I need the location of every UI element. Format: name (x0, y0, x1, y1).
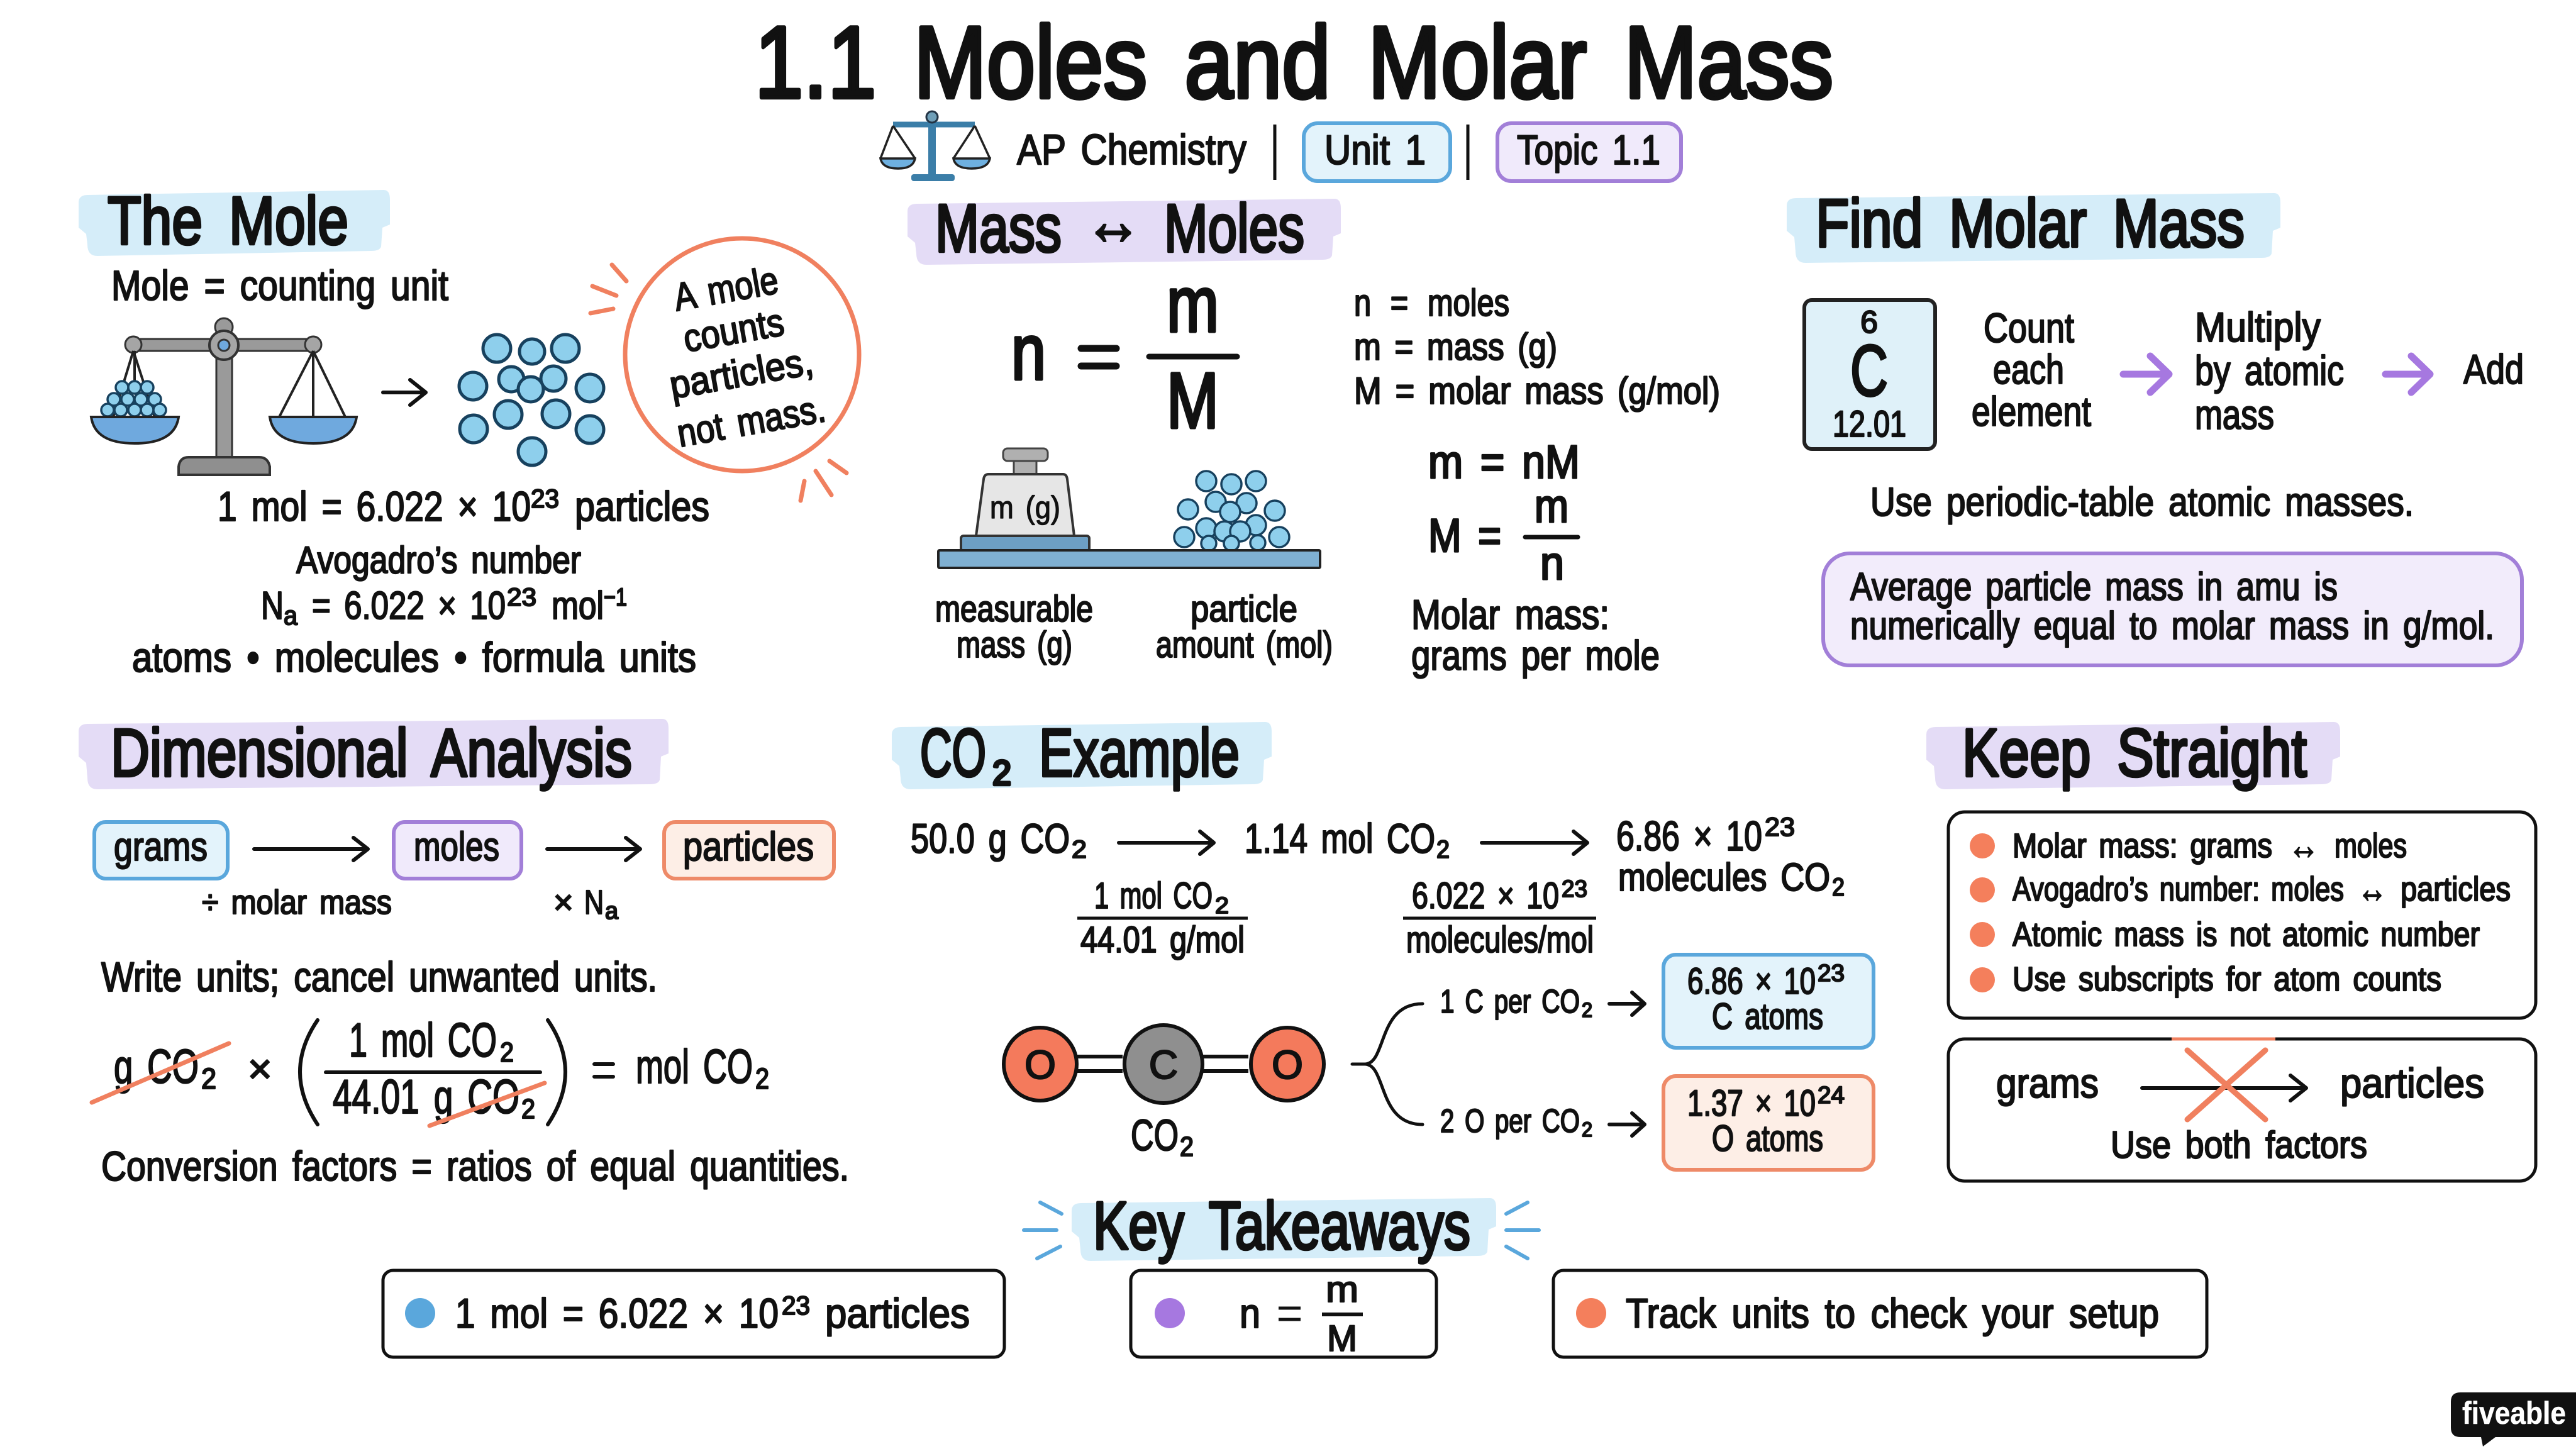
caption: measurable mass: measurable (935, 589, 1093, 630)
particle types list: atoms • molecules • formula units (132, 634, 696, 680)
takeaway: one mole (383, 1270, 1004, 1357)
diagram: co2 molecule: C (1149, 1042, 1178, 1087)
arrow: moles to molecules (1482, 831, 1587, 854)
takeaway: one mole: 1 mol = 6.022 × 10 (455, 1290, 779, 1336)
conversion factor: avogadro: 6.022 × 10 (1412, 875, 1559, 916)
takeaway: one mole: 23 (782, 1291, 810, 1320)
conversion factor: molar mass: 1 mol CO (1094, 875, 1213, 916)
arrow: grams to moles (254, 838, 368, 860)
course label: AP Chemistry (1017, 126, 1246, 174)
badge: unit (1304, 123, 1450, 181)
equation: unit cancellation (92, 1014, 769, 1126)
conversion: molecules: 2 (1832, 874, 1845, 901)
step: count each element: Count (1984, 304, 2074, 351)
heading: keep straight: Keep Straight (1962, 714, 2307, 791)
callout: a mole counts particles (591, 238, 859, 501)
rule one: ↔ (2288, 821, 2319, 868)
label: carbon ratio: 1 C per CO (1440, 984, 1580, 1020)
logo: fiveable (2451, 1392, 2576, 1446)
rule three: Atomic mass is not atomic number (2012, 916, 2480, 953)
conversion factor: avogadro: 23 (1562, 876, 1587, 902)
box: no shortcut warning (1948, 1039, 2536, 1181)
result box: oxygen atoms: O atoms (1712, 1118, 1823, 1159)
arrow: mass to moles (1119, 831, 1214, 854)
formula: avogadro constant: −1 (604, 584, 627, 611)
equation: unit cancellation: 2 (521, 1094, 535, 1124)
equation: unit cancellation: g CO (114, 1040, 199, 1094)
label: co2: CO (1131, 1111, 1179, 1160)
badge: unit: Unit 1 (1324, 126, 1426, 173)
note: molar mass definition: grams per mole (1411, 632, 1660, 679)
takeaway: one mole: particles (825, 1290, 970, 1336)
takeaway: formula: M (1327, 1318, 1357, 1359)
formula: M equals m over n: n (1540, 537, 1564, 589)
takeaway: track units: Track units to check your setup (1626, 1290, 2159, 1336)
step: count each element: element (1972, 388, 2091, 435)
formula: avogadro constant: 23 (507, 584, 536, 611)
equation: unit cancellation: 2 (755, 1062, 769, 1095)
box: rules list (1948, 812, 2536, 1018)
variable legend: n = moles (1354, 282, 1509, 324)
box: no shortcut warning: Use both factors (2111, 1124, 2367, 1166)
step: add: Add (2463, 346, 2524, 392)
label: times avogadro: × (553, 884, 574, 921)
label: avogadro's number: Avogadro’s number (296, 539, 581, 581)
equation: unit cancellation: 2 (500, 1037, 514, 1068)
rule one: Molar mass: grams (2012, 827, 2272, 865)
heading: co2 example: 2 (992, 753, 1011, 792)
arrow: to carbon atoms (1609, 992, 1645, 1015)
heading: mass moles: Mass (935, 190, 1062, 266)
callout: a mole counts particles: counts (680, 301, 787, 361)
step: count each element (1972, 304, 2091, 435)
heading: dimensional analysis: Dimensional Analysis (111, 714, 632, 791)
flow: particles box: particles (683, 824, 814, 869)
badge: topic: Topic 1.1 (1517, 126, 1660, 173)
periodic table tile: carbon: C (1850, 331, 1888, 411)
callout: a mole counts particles: particles, (667, 340, 816, 408)
conversion: molecules (1616, 812, 1845, 901)
formula: one mole: 23 (531, 484, 559, 513)
icon: small balance scale (880, 111, 990, 181)
caption: particle amount (1156, 589, 1333, 665)
arrow: to oxygen atoms (1609, 1113, 1645, 1136)
logo: fiveable: fiveable (2462, 1396, 2566, 1431)
variable legend: M = molar mass (g/mol) (1354, 370, 1720, 412)
periodic table tile: carbon: 12.01 (1833, 404, 1906, 445)
note: molar mass definition (1411, 591, 1660, 679)
heading: find molar mass: Find Molar Mass (1816, 185, 2245, 261)
rule one: moles (2334, 827, 2407, 865)
conversion: moles: 2 (1436, 836, 1450, 863)
formula: one mole: particles (575, 483, 709, 530)
heading: co2 example: CO (920, 714, 986, 791)
result box: oxygen atoms: 1.37 × 10 (1687, 1083, 1816, 1124)
panel: keep straight (1926, 714, 2536, 1181)
conversion: molecules: 6.86 × 10 (1616, 813, 1762, 859)
formula: M equals m over n: M = (1428, 509, 1501, 562)
badge: topic (1497, 123, 1681, 181)
formula: avogadro constant (261, 584, 627, 630)
subtitle row (880, 111, 1681, 181)
formula: avogadro constant: a (284, 601, 298, 630)
label: times avogadro: a (605, 898, 619, 924)
variable legend (1354, 282, 1720, 412)
heading: the mole: The Mole (108, 182, 348, 258)
periodic table tile: carbon: 6 (1860, 304, 1878, 340)
takeaway: formula: n (1240, 1290, 1260, 1336)
formula: n equals m over M: M (1167, 357, 1219, 445)
panel: mass and moles (908, 181, 1720, 679)
result box: carbon atoms: 6.86 × 10 (1687, 961, 1816, 1002)
caption: particle amount: amount (mol) (1156, 625, 1333, 665)
definition text: Mole = counting unit (111, 262, 448, 309)
step: multiply by atomic mass: mass (2195, 391, 2274, 438)
conversion: molecules: molecules CO (1618, 856, 1830, 899)
label: divide by molar mass: ÷ molar mass (202, 884, 392, 921)
rule two: Avogadro’s number: moles (2012, 870, 2344, 908)
conversion: starting mass: 2 (1072, 836, 1087, 863)
formula: M equals m over n (1428, 480, 1578, 589)
label: times avogadro: N (584, 884, 604, 921)
formula: one mole: 1 mol = 6.022 × 10 (218, 483, 531, 530)
formula: n equals m over M (1011, 261, 1237, 445)
result box: carbon atoms: 23 (1818, 960, 1845, 987)
formula: avogadro constant: = 6.022 × 10 (312, 584, 506, 628)
takeaway: formula: m (1326, 1269, 1358, 1310)
step: multiply by atomic mass: Multiply (2195, 304, 2321, 350)
label: carbon ratio: 2 (1582, 999, 1592, 1021)
equation: unit cancellation: 2 (201, 1062, 216, 1095)
box: no shortcut warning: grams (1996, 1060, 2099, 1106)
panel: find molar mass (1787, 185, 2524, 665)
result box: carbon atoms (1663, 955, 1874, 1048)
heading: mass moles: ↔ (1084, 181, 1142, 260)
formula: n equals m over M: n (1011, 309, 1046, 396)
equation: unit cancellation: × (248, 1045, 272, 1092)
arrow: step one to two (2123, 356, 2169, 392)
caption: measurable mass: mass (g) (957, 625, 1072, 665)
conversion: molecules: 23 (1765, 812, 1795, 841)
heading: co2 example: Example (1039, 714, 1240, 791)
heading: key takeaways: Key Takeaways (1093, 1187, 1470, 1263)
result box: oxygen atoms: 24 (1818, 1082, 1845, 1109)
label: times avogadro (553, 884, 619, 924)
icon: weight and particles on platform (938, 448, 1320, 568)
arrow: scale to particles (383, 380, 426, 405)
callout: a mole counts particles: not mass. (674, 387, 829, 456)
conversion factor: avogadro: molecules/mol (1406, 919, 1594, 960)
callout: a mole counts particles: A mole (670, 258, 782, 319)
conversion factor: molar mass (1077, 875, 1248, 960)
caption: measurable mass (935, 589, 1093, 665)
rule two: ↔ (2357, 865, 2387, 911)
rule one (1970, 821, 2407, 868)
formula: avogadro constant: mol (552, 584, 604, 628)
flow: moles box (394, 822, 521, 879)
flow: grams box: grams (114, 824, 208, 869)
heading: co2 example (892, 714, 1272, 792)
equation: unit cancellation: 44.01 g CO (333, 1070, 519, 1124)
formula: avogadro constant: N (261, 584, 284, 628)
result box: carbon atoms: C atoms (1712, 996, 1823, 1037)
label: oxygen ratio: 2 O per CO (1440, 1103, 1580, 1140)
note: molar mass definition: Molar mass: (1411, 591, 1609, 638)
note: periodic table: Use periodic-table atomic masses. (1870, 479, 2414, 525)
instruction text: Write units; cancel unwanted units. (101, 953, 657, 1000)
icon: particle cluster (459, 335, 604, 465)
flow: moles box: moles (414, 824, 499, 869)
heading: mass moles (908, 181, 1341, 266)
decorative burst ticks (1024, 1202, 1539, 1258)
step: multiply by atomic mass: by atomic (2195, 347, 2344, 394)
label: co2: 2 (1180, 1131, 1194, 1162)
note: conversion factors: Conversion factors = ratios of equal quantities. (101, 1143, 849, 1189)
icon: balance scale with particles (91, 318, 357, 475)
formula: m equals nM: m = nM (1428, 436, 1580, 488)
callout: amu and g/mol (1823, 553, 2522, 665)
conversion: starting mass: 50.0 g CO (911, 815, 1070, 862)
conversion: moles: 1.14 mol CO (1245, 815, 1435, 862)
box: no shortcut warning: particles (2340, 1060, 2484, 1106)
callout: amu and g/mol: Average particle mass in amu is (1850, 565, 2338, 609)
arrow: moles to particles (547, 838, 640, 860)
label: oxygen ratio: 2 (1582, 1118, 1592, 1141)
equation: unit cancellation: 1 mol CO (349, 1014, 497, 1067)
conversion factor: molar mass: 44.01 g/mol (1080, 919, 1245, 960)
rule four: Use subscripts for atom counts (2012, 960, 2441, 998)
periodic table tile: carbon (1804, 300, 1935, 449)
rule two (1970, 865, 2511, 911)
result box: oxygen atoms (1663, 1076, 1874, 1170)
equation: unit cancellation: mol CO (636, 1040, 753, 1094)
step: count each element: each (1993, 346, 2064, 392)
panel: the mole (79, 182, 859, 680)
icon: weight and particles on platform: m (g) (990, 490, 1060, 525)
formula: M equals m over n: m (1535, 480, 1568, 532)
brace: branch to atoms (1352, 1004, 1423, 1124)
panel: key takeaways (383, 1187, 2207, 1359)
conversion factor: molar mass: 2 (1215, 892, 1229, 918)
diagram: co2 molecule (1004, 1025, 1324, 1103)
takeaway: formula (1131, 1269, 1436, 1359)
heading: mass moles: Moles (1164, 190, 1304, 266)
step: multiply by atomic mass (2195, 304, 2344, 438)
title: 1.1 Moles and Molar Mass (755, 6, 1833, 119)
conversion factor: avogadro (1403, 875, 1596, 960)
diagram: co2 molecule: O (1272, 1042, 1303, 1087)
panel: co2 example (892, 714, 1874, 1170)
panel: dimensional analysis (79, 714, 849, 1189)
flow: grams box (94, 822, 228, 879)
formula: n equals m over M: m (1167, 261, 1219, 348)
diagram: co2 molecule: O (1024, 1042, 1056, 1087)
caption: particle amount: particle (1191, 589, 1297, 630)
variable legend: m = mass (g) (1354, 326, 1557, 368)
takeaway: track units (1553, 1270, 2207, 1357)
rule two: particles (2401, 870, 2511, 908)
arrow: step two to three (2385, 356, 2430, 392)
